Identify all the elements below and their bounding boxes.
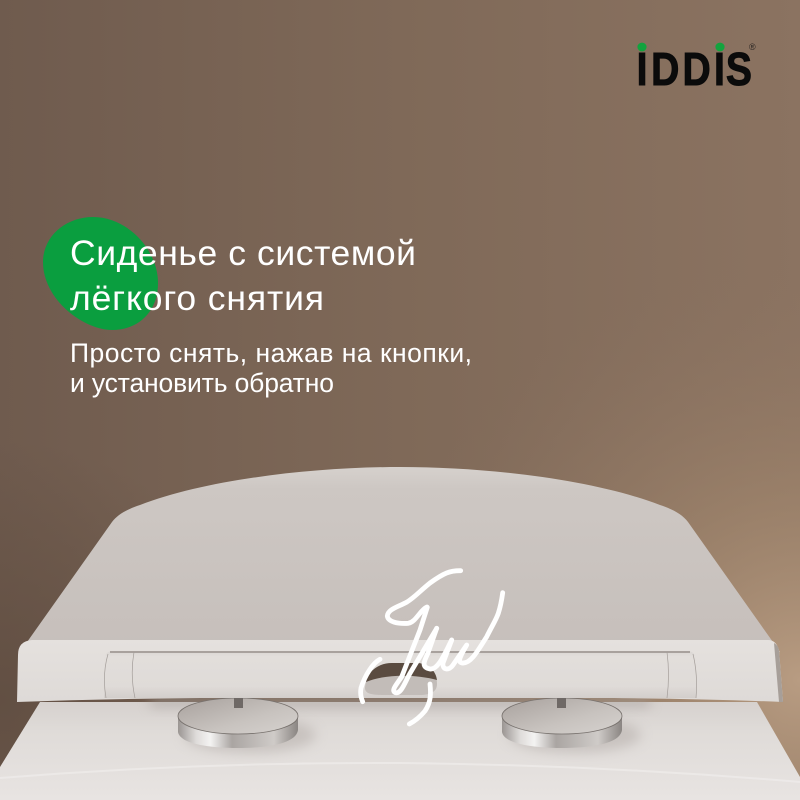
right hinge bbox=[502, 697, 641, 753]
heading bbox=[70, 233, 416, 318]
release channel bbox=[104, 651, 696, 698]
right release button bbox=[667, 652, 697, 698]
description: и установить обратно bbox=[70, 368, 334, 398]
description: Просто снять, нажав на кнопки, bbox=[70, 338, 472, 368]
left hinge bbox=[178, 697, 316, 753]
left release button bbox=[104, 652, 135, 698]
seat front band bbox=[17, 640, 783, 702]
heading: Сиденье с системой bbox=[70, 233, 416, 273]
green blob bbox=[43, 217, 158, 330]
release slot bbox=[365, 663, 437, 695]
description bbox=[70, 338, 472, 398]
heading: лёгкого снятия bbox=[70, 278, 324, 318]
logo: IDDIS: ® bbox=[749, 42, 756, 52]
toilet seat bbox=[17, 467, 783, 702]
logo: IDDIS: IDDIS bbox=[637, 44, 752, 96]
toilet bowl bbox=[0, 697, 800, 800]
icon: hand pressing button bbox=[361, 571, 503, 724]
seat lid top surface bbox=[20, 467, 780, 652]
